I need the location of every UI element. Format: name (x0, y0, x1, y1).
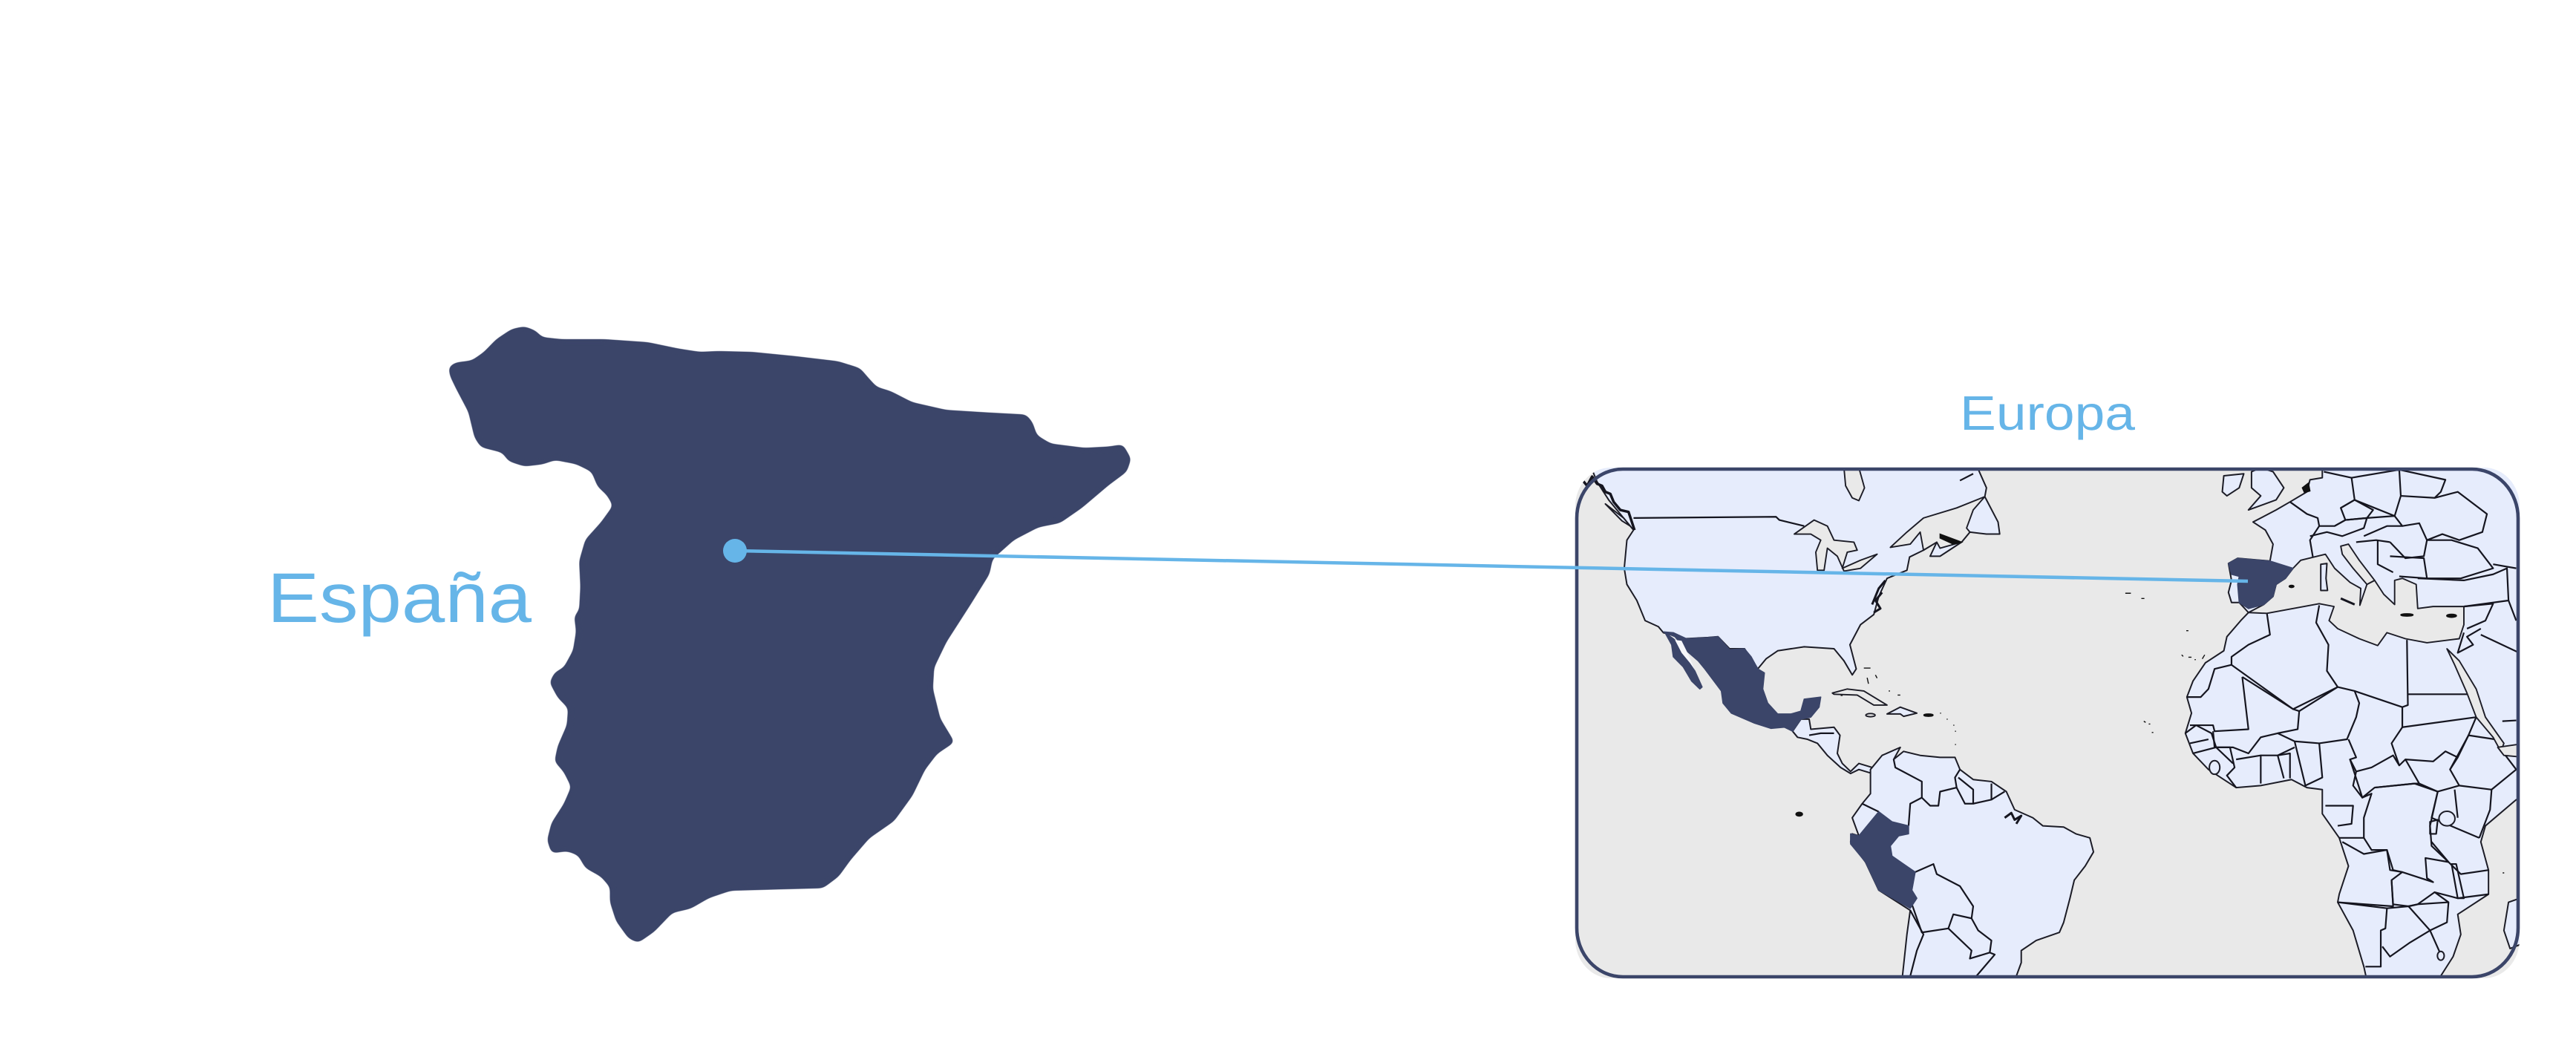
marker dot (723, 539, 747, 563)
Caribbean islands (1832, 689, 1887, 705)
Europe and Africa (2125, 465, 2526, 981)
Mexico highlighted (1664, 632, 1821, 731)
Spain highlighted (2229, 558, 2293, 609)
map frame (1577, 469, 2518, 977)
South America (1851, 747, 2093, 981)
Peru highlighted (1851, 812, 1917, 909)
label: Europa: Europa (1960, 386, 2136, 440)
Central America (1793, 719, 1872, 773)
panel: world map (1570, 462, 2526, 983)
Americas (1580, 462, 2093, 981)
map: silhouette of Spain (449, 327, 1131, 943)
label: España: España (267, 559, 532, 638)
seas over the land (2249, 544, 2526, 949)
lakes and islands (2125, 483, 2504, 960)
map background and land (1570, 462, 2526, 983)
country borders (2186, 470, 2520, 966)
arrow: connector line from Spain to its map location (735, 551, 2248, 581)
